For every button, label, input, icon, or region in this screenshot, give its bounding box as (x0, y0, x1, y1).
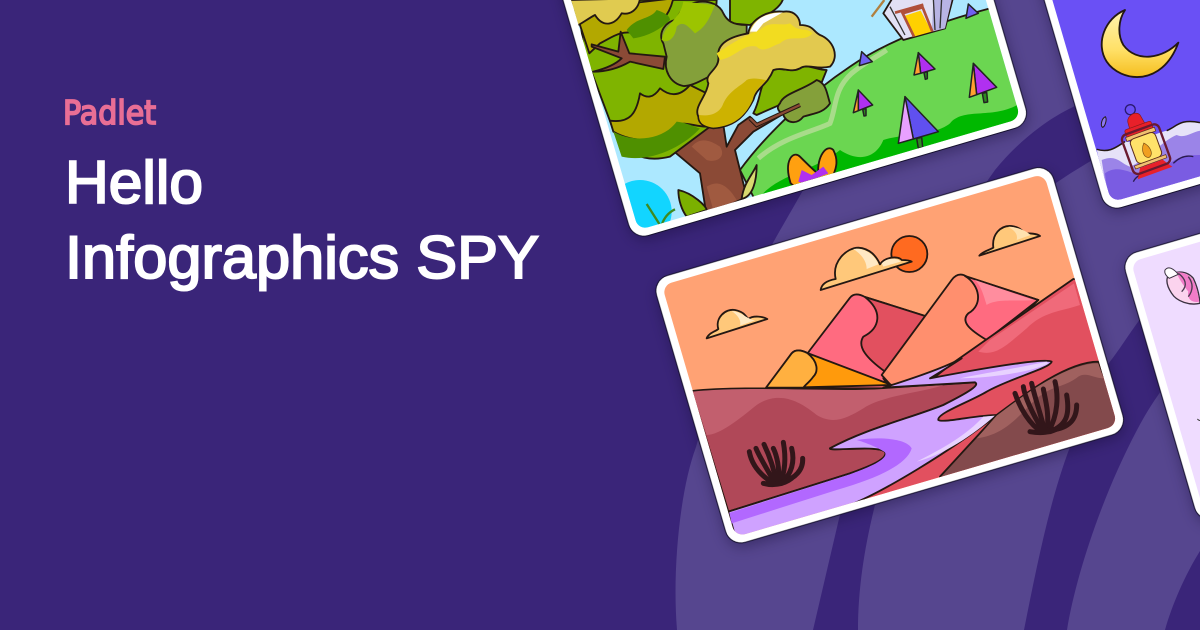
brown right hill (940, 362, 1123, 485)
hill (740, 8, 1018, 197)
card: shell illustration (1121, 232, 1200, 524)
branch (592, 32, 665, 72)
bush left (749, 442, 803, 485)
right dune (882, 275, 1038, 392)
title line 1: Hello (65, 149, 203, 216)
leaves (678, 190, 707, 217)
canopy left (570, 0, 717, 159)
right lime and olive foliage (753, 66, 827, 115)
card: desert mountains and river illustration (654, 166, 1128, 552)
yellow canopy (697, 11, 835, 128)
shell (1167, 272, 1200, 304)
sun (891, 236, 927, 272)
waves (1096, 122, 1200, 184)
title line 2: Infographics SPY (65, 224, 539, 291)
clouds (821, 248, 912, 290)
bush right (1015, 382, 1077, 433)
card: lantern on waves illustration (1028, 0, 1200, 223)
title (65, 149, 539, 291)
left hill (692, 382, 976, 512)
river (728, 358, 1052, 542)
lantern (1120, 104, 1172, 180)
decorative background bands (676, 0, 1200, 630)
middle canopy (737, 0, 738, 23)
flower plant (788, 148, 836, 188)
small trees (853, 4, 997, 148)
red right hill (863, 278, 1123, 502)
card: tree and hill illustration (558, 0, 1032, 244)
house (883, 0, 953, 40)
logo: Padlet: Padlet (63, 93, 156, 132)
orange dune (766, 350, 892, 388)
middle dune (806, 294, 925, 388)
moon (1102, 10, 1178, 77)
trunk (675, 116, 782, 211)
